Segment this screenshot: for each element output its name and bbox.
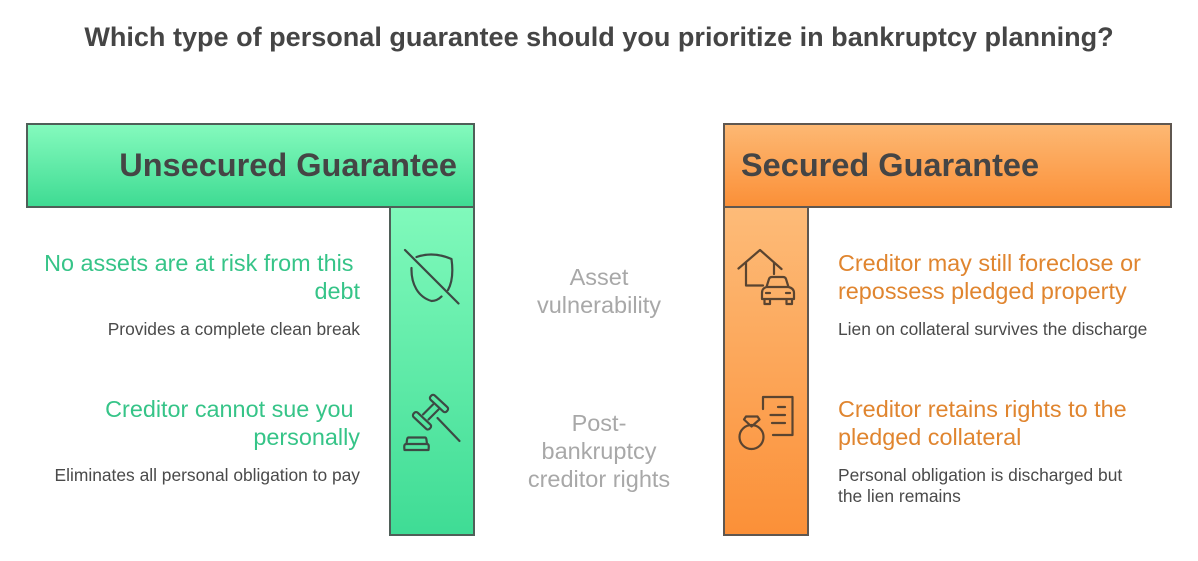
panel: unsecured guarantee column	[389, 206, 475, 536]
label: post-bankruptcy creditor rights: bankruptcy	[542, 438, 656, 464]
statement: debt	[314, 278, 360, 304]
statement	[105, 396, 360, 450]
label: post-bankruptcy creditor rights: Post-	[572, 410, 626, 436]
description: Personal obligation is discharged but	[838, 465, 1122, 485]
panel: secured guarantee header	[723, 123, 1172, 208]
statement	[838, 250, 1141, 304]
label: asset vulnerability	[537, 264, 661, 318]
heading: secured guarantee: Secured Guarantee	[741, 147, 1039, 183]
statement: Creditor retains rights to the	[838, 396, 1127, 422]
text: creditor may foreclose	[838, 250, 1147, 339]
title: Which type of personal guarantee should you prioritize in bankruptcy planning?	[84, 22, 1114, 52]
panel: unsecured guarantee header	[26, 123, 475, 208]
icon: gavel	[403, 394, 461, 452]
description: Eliminates all personal obligation to pay	[55, 465, 360, 485]
statement	[838, 396, 1127, 450]
text: creditor retains rights	[838, 396, 1127, 506]
label: asset vulnerability: vulnerability	[537, 292, 661, 318]
description	[838, 465, 1122, 506]
statement: personally	[253, 424, 360, 450]
description: Provides a complete clean break	[108, 319, 360, 339]
description: the lien remains	[838, 486, 961, 506]
statement: pledged collateral	[838, 424, 1021, 450]
description: Lien on collateral survives the discharge	[838, 319, 1147, 339]
text: creditor cannot sue	[55, 396, 360, 485]
statement: Creditor may still foreclose or	[838, 250, 1141, 276]
statement: No assets are at risk from this	[44, 250, 354, 276]
label: post-bankruptcy creditor rights: creditor rights	[528, 466, 670, 492]
heading: unsecured guarantee: Unsecured Guarantee	[119, 147, 457, 183]
icon: ring and document	[738, 396, 794, 450]
text: no assets at risk	[44, 250, 360, 339]
statement: Creditor cannot sue you	[105, 396, 354, 422]
statement	[44, 250, 360, 304]
icon: crossed-out shield	[404, 248, 460, 305]
statement: repossess pledged property	[838, 278, 1127, 304]
panel: secured guarantee column	[723, 206, 809, 536]
icon: house and car	[737, 248, 796, 306]
label: asset vulnerability: Asset	[570, 264, 628, 290]
label: post-bankruptcy creditor rights	[528, 410, 670, 492]
